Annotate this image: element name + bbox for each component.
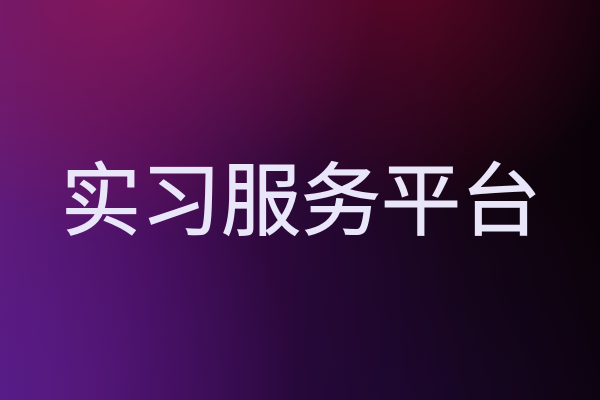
title: 实习服务平台 <box>61 157 541 246</box>
